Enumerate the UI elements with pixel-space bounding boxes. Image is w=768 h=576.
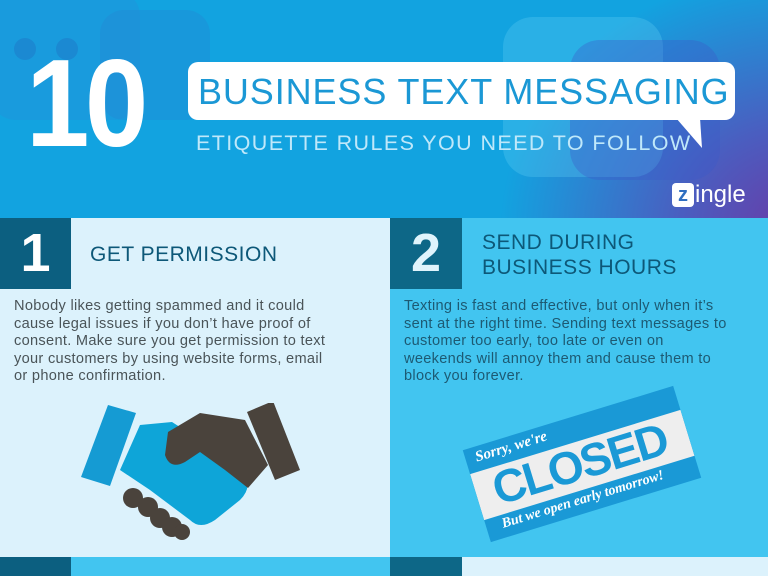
body text: block you forever. (404, 368, 524, 384)
body text: cause legal issues if you don’t have proof of (14, 316, 311, 332)
number box 1: 1 (20, 223, 51, 283)
body text: or phone confirmation. (14, 368, 166, 384)
body text: Texting is fast and effective, but only when it’s (404, 298, 713, 314)
panel: send during business hours (390, 218, 768, 557)
big number 10: 10 (26, 35, 144, 173)
decorative bubbles (0, 0, 140, 120)
body text (404, 298, 727, 384)
body text: consent. Make sure you get permission to text (14, 333, 325, 349)
heading: BUSINESS HOURS (482, 256, 677, 279)
panel: rule 4 (partial) (390, 557, 768, 576)
icon: closed sign: CLOSED (486, 413, 673, 515)
bubble tail (676, 118, 714, 148)
title bubble (188, 62, 735, 120)
logo: zingle (672, 181, 746, 208)
title: BUSINESS TEXT MESSAGING (198, 71, 730, 112)
body text (14, 298, 325, 384)
logo: zingle: ingle (695, 181, 746, 208)
number box 1 (0, 218, 71, 289)
heading (482, 231, 677, 279)
body text: sent at the right time. Sending text messages to (404, 316, 727, 332)
icon: closed sign (463, 386, 701, 542)
heading: SEND DURING (482, 231, 635, 254)
body text: customer too early, too late or even on (404, 333, 664, 349)
panel: get permission (0, 218, 390, 557)
panel: rule 3 (partial) (0, 557, 390, 576)
body text: weekends will annoy them and cause them to (404, 350, 711, 366)
number box 2 (390, 218, 462, 289)
header banner (0, 0, 768, 218)
body text: Nobody likes getting spammed and it could (14, 298, 305, 314)
subtitle: ETIQUETTE RULES YOU NEED TO FOLLOW (196, 131, 692, 155)
icon: closed sign: But we open early tomorrow! (500, 468, 666, 532)
logo: zingle: z (678, 184, 688, 206)
number box 2: 2 (411, 223, 441, 283)
body text: your customers by using website forms, email (14, 350, 322, 366)
icon: closed sign: Sorry, we're (473, 428, 549, 466)
icon: handshake (81, 403, 300, 540)
heading: GET PERMISSION (90, 243, 277, 266)
